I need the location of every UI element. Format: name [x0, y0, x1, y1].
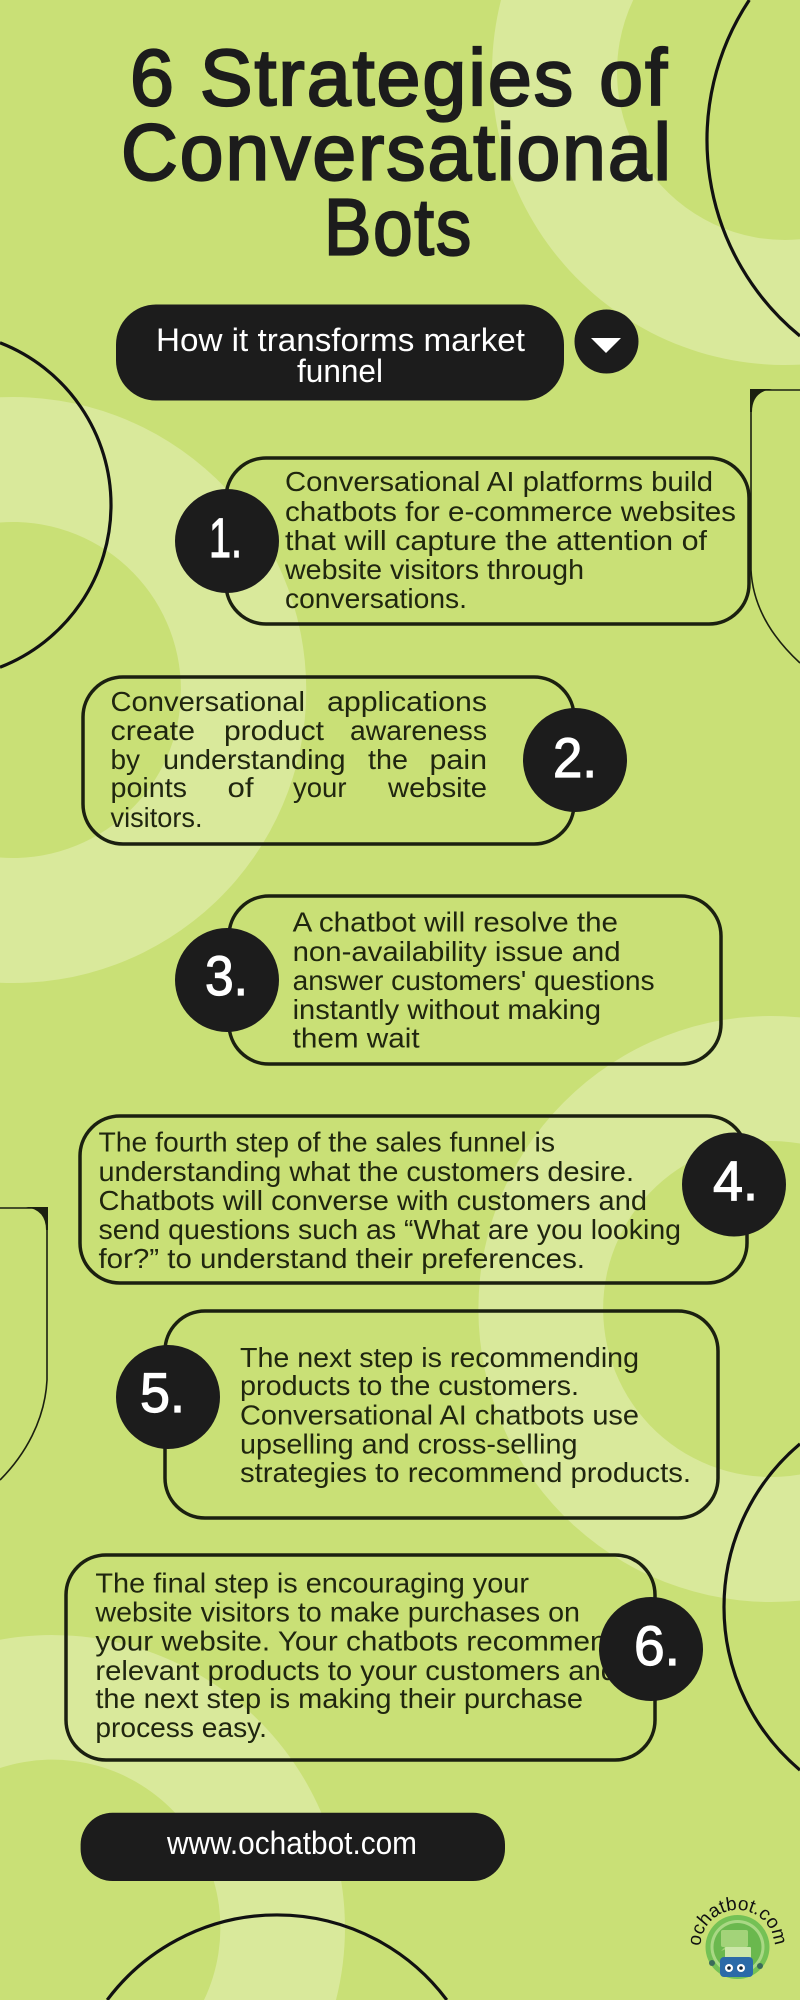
step 3 badge	[175, 928, 279, 1032]
step 2 text	[110, 686, 487, 833]
step 6 badge: 6.	[634, 1614, 680, 1677]
title	[121, 33, 673, 272]
step 6 text: process easy.	[95, 1712, 267, 1743]
step 1 text: chatbots for e-commerce websites	[285, 496, 736, 527]
step 4 text: The fourth step of the sales funnel is	[98, 1126, 555, 1158]
step 5 text: upselling and cross-selling	[240, 1428, 578, 1460]
step 2 text: understanding	[163, 744, 346, 775]
step 3 text: them wait	[293, 1023, 420, 1054]
panel: step 2	[83, 677, 627, 844]
website pill: www.ochatbot.com	[166, 1825, 417, 1861]
step 6 text: website visitors to make purchases on	[94, 1597, 580, 1628]
step 1 text: that will capture the attention of	[285, 525, 707, 556]
panel: step 4	[80, 1116, 786, 1283]
arch outline: left	[0, 1207, 48, 1480]
subtitle pill	[116, 304, 564, 400]
step 5 text	[240, 1342, 691, 1488]
panel: step 1	[175, 458, 749, 624]
title: 6 Strategies of	[130, 33, 669, 122]
outline circle: left	[0, 343, 111, 667]
step 2 text: website	[387, 772, 487, 803]
step 2 text: your	[293, 772, 346, 803]
icon: ochatbot logo: ochatbot.com	[690, 1897, 784, 1945]
website pill	[81, 1813, 505, 1881]
step 2 text: visitors.	[110, 802, 202, 833]
step 2 text: applications	[327, 686, 487, 717]
step 2 text: Conversational	[110, 686, 305, 717]
outline circle: bottom	[107, 1915, 447, 2000]
step 3 text: answer customers' questions	[293, 965, 655, 996]
step 3 text: non-availability issue and	[293, 936, 621, 967]
step 5 text: strategies to recommend products.	[240, 1457, 691, 1488]
step 2 text: by	[110, 744, 140, 775]
step 2 text: product	[224, 715, 324, 746]
subtitle pill: How it transforms market	[156, 322, 525, 358]
icon: down arrow button	[574, 310, 638, 374]
step 2 badge	[523, 708, 627, 812]
step 3 text: A chatbot will resolve the	[293, 907, 618, 938]
step 3 text	[293, 907, 655, 1054]
panel: step 5	[116, 1311, 718, 1518]
step 6 text: the next step is making their purchase	[95, 1683, 583, 1714]
outline circle: lower right	[724, 1444, 800, 1770]
icon: ochatbot logo	[690, 1897, 784, 1979]
step 2 text: the	[368, 744, 408, 775]
step 6 text: your website. Your chatbots recommend	[95, 1626, 623, 1657]
step 5 text: The next step is recommending	[240, 1342, 639, 1373]
step 2 text: pain	[430, 744, 487, 775]
step 6 text	[94, 1568, 623, 1743]
step 2 text: of	[228, 772, 254, 803]
step 5 badge	[116, 1345, 220, 1449]
step 4 text: for?” to understand their preferences.	[98, 1243, 585, 1274]
step 3 badge: 3.	[205, 944, 248, 1007]
step 4 text: send questions such as “What are you looking	[98, 1214, 681, 1245]
step 1 text: Conversational AI platforms build	[285, 466, 713, 497]
title: Conversational	[121, 108, 673, 196]
step 4 text	[98, 1126, 681, 1274]
step 1 text	[284, 466, 736, 614]
subtitle pill: funnel	[297, 353, 383, 389]
step 5 text: Conversational AI chatbots use	[240, 1400, 639, 1431]
step 4 badge	[682, 1132, 786, 1236]
step 4 text: understanding what the customers desire.	[98, 1156, 634, 1187]
outline circle: top right	[707, 0, 800, 336]
step 1 text: website visitors through	[284, 554, 584, 585]
panel: step 3	[175, 896, 721, 1064]
step 4 badge: 4.	[713, 1149, 758, 1212]
title: Bots	[324, 182, 473, 272]
step 6 text: The final step is encouraging your	[95, 1568, 529, 1599]
step 2 text: create	[110, 715, 195, 746]
step 3 text: instantly without making	[293, 994, 601, 1025]
step 1 text: conversations.	[285, 583, 467, 614]
step 2 text: points	[110, 772, 187, 803]
step 2 badge: 2.	[553, 726, 597, 789]
step 6 badge	[599, 1597, 703, 1701]
step 5 badge: 5.	[140, 1361, 185, 1424]
panel: step 6	[66, 1555, 703, 1760]
step 6 text: relevant products to your customers and	[95, 1655, 617, 1686]
step 4 text: Chatbots will converse with customers and	[98, 1185, 647, 1216]
step 2 text: awareness	[350, 715, 487, 746]
step 5 text: products to the customers.	[240, 1370, 579, 1401]
arch outline: right	[750, 389, 800, 663]
step 1 badge	[175, 489, 279, 593]
step 1 badge: 1.	[209, 506, 242, 569]
